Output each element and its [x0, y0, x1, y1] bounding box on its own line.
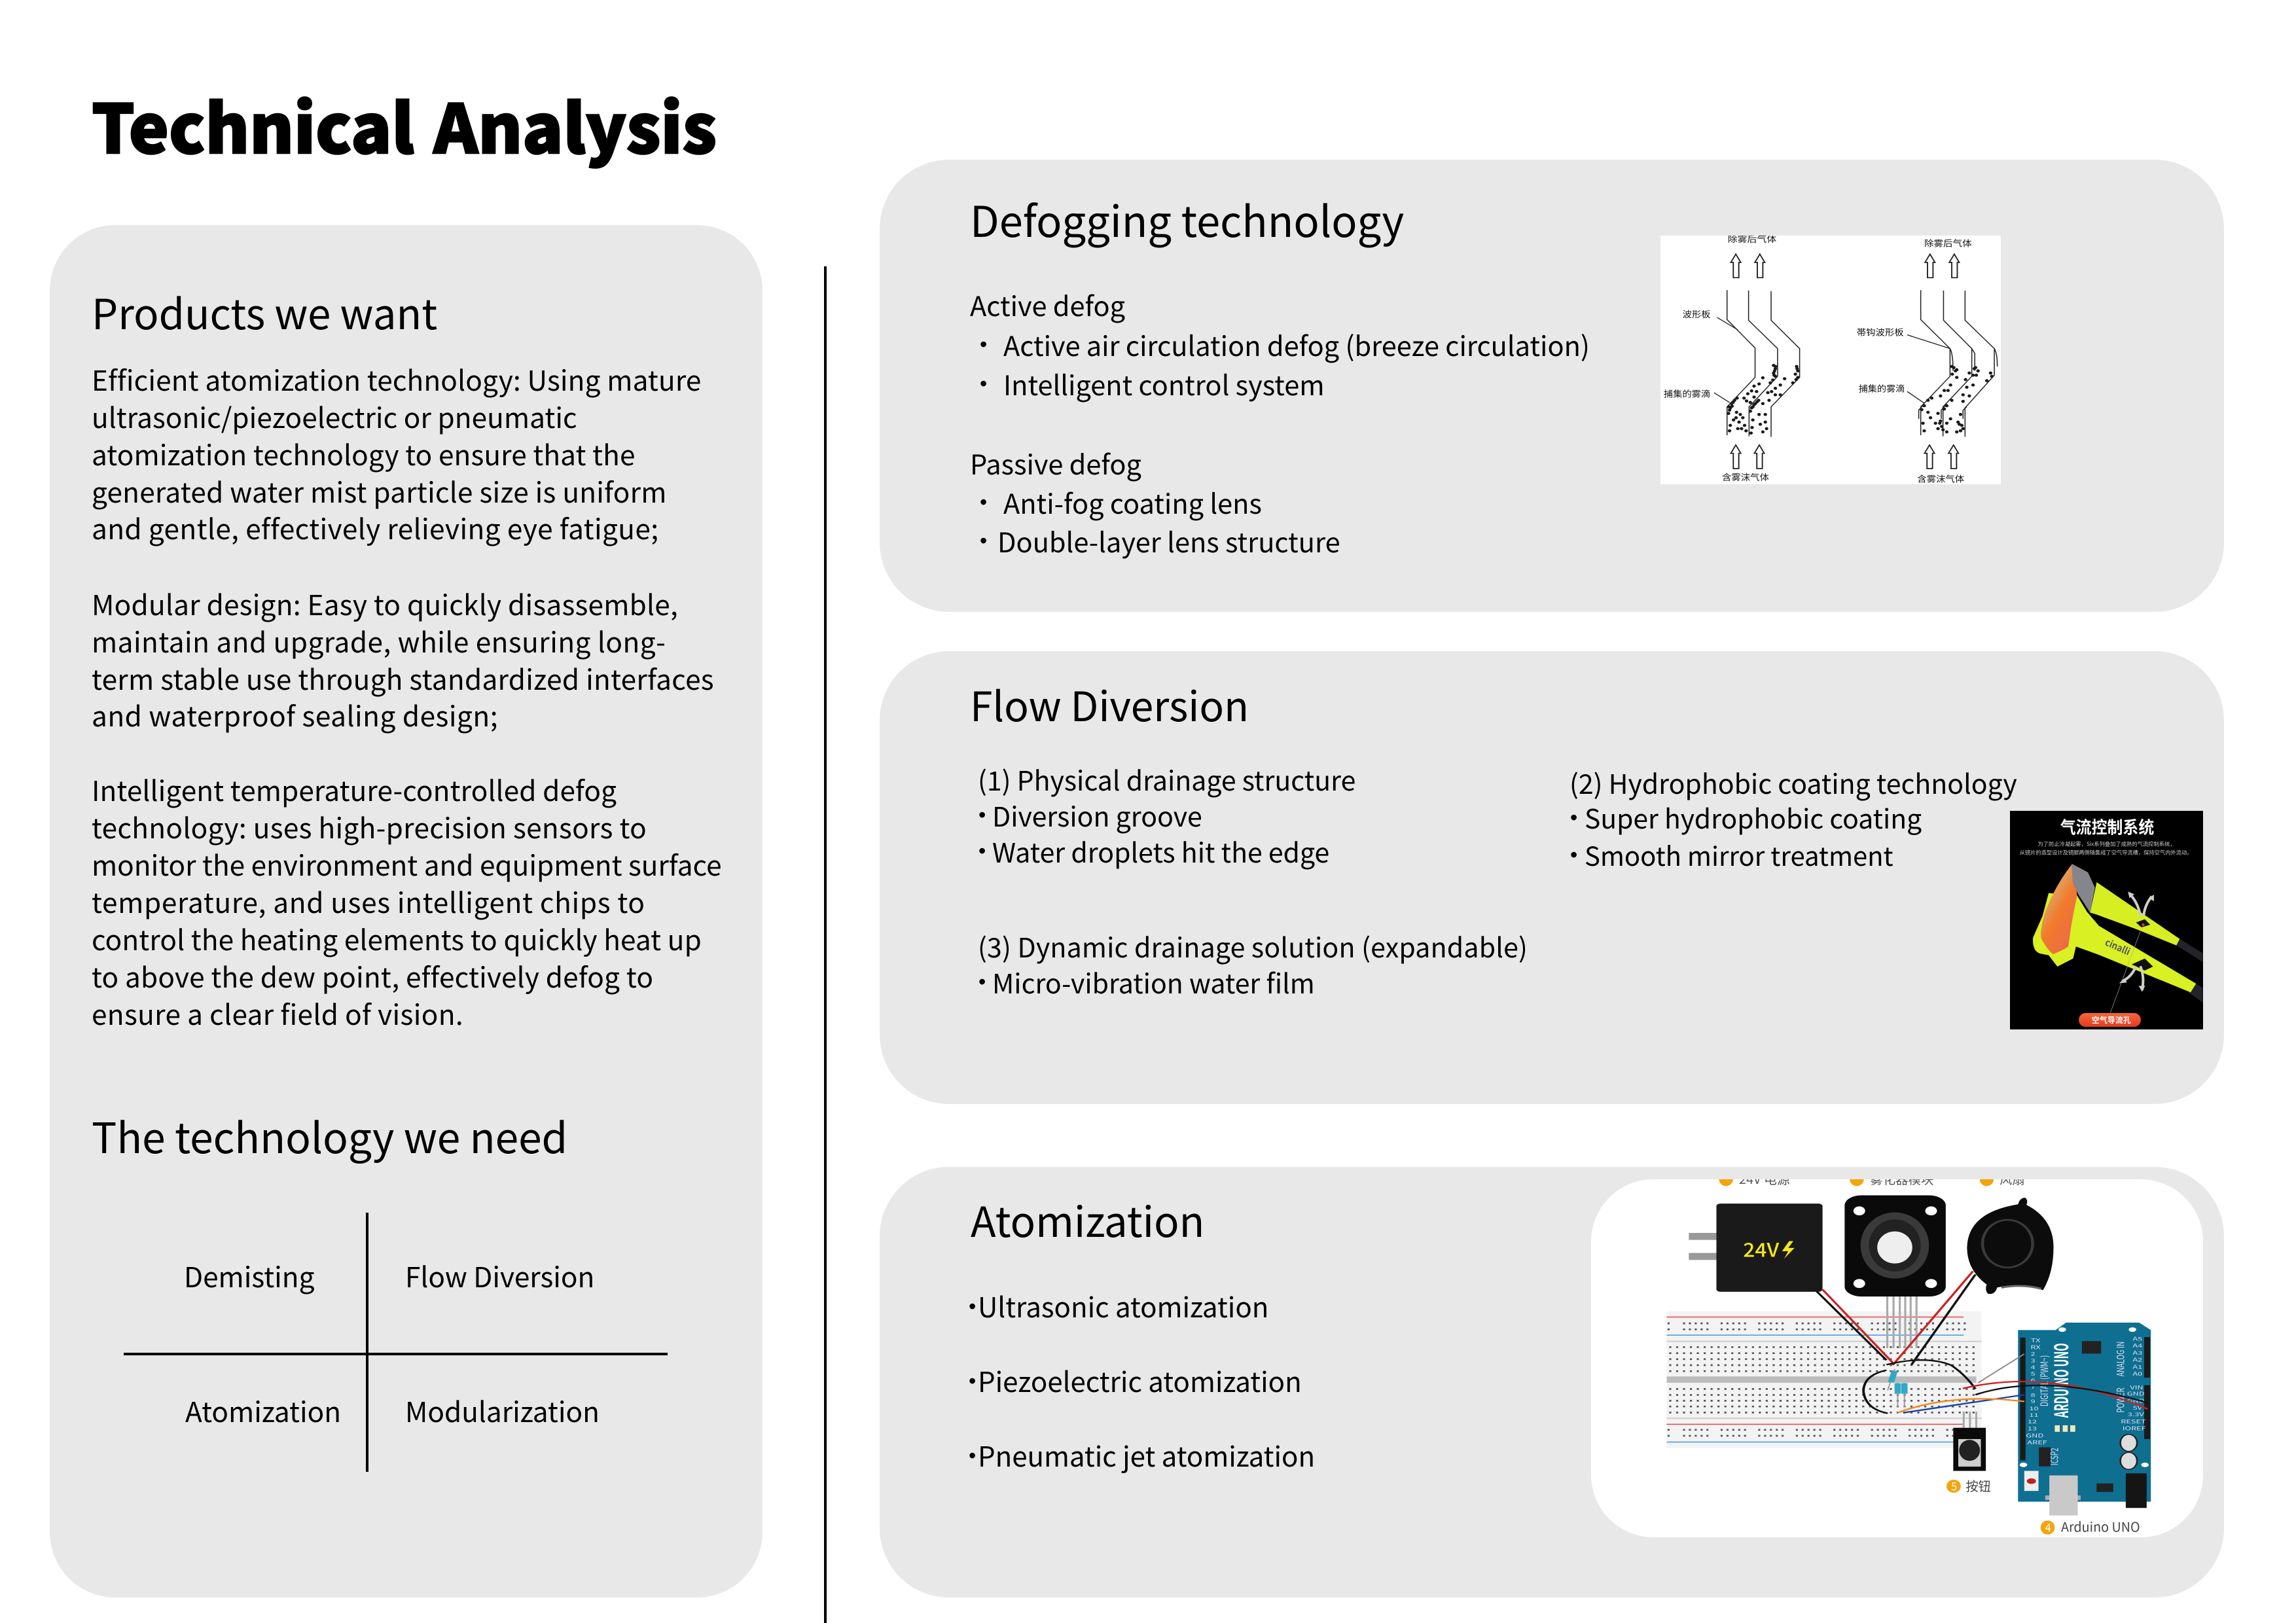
wires and resistors	[1817, 1271, 2147, 1414]
diagram labels: 除雾后气体	[1924, 238, 1972, 249]
diagram labels: 捕集的雾滴	[1859, 382, 1905, 395]
text block: modular design: term stable use through standardized interfaces	[92, 658, 714, 698]
component labels	[1719, 1169, 2024, 1188]
icon: Arduino UNO board	[2018, 1323, 2151, 1516]
label: button: 按钮	[1965, 1476, 1991, 1495]
text block: hydrophobic coating	[1570, 762, 2017, 874]
icon: Arduino UNO board: POWER	[2112, 1387, 2127, 1413]
diagram labels: 捕集的雾滴	[1664, 388, 1710, 400]
panel: atomization: •	[969, 1369, 976, 1393]
text block: active defog	[970, 285, 1590, 403]
text block: efficient atomization: ultrasonic/piezoelectric or pneumatic	[92, 397, 577, 437]
text block: hydrophobic coating: Super hydrophobic coating	[1585, 798, 1922, 836]
text block: atomization methods	[969, 1286, 1315, 1475]
text block: physical drainage structure	[978, 759, 1355, 870]
panel: atomization: •	[969, 1294, 976, 1318]
text block: atomization methods: Piezoelectric atomization	[978, 1361, 1302, 1400]
icon: Arduino UNO board: ANALOG IN	[2112, 1342, 2127, 1376]
cell: modularization: Modularization	[405, 1391, 600, 1431]
pin labels: VIN	[2130, 1384, 2144, 1391]
heading: products we want: Products we want	[92, 281, 437, 342]
pin labels: A3	[2132, 1349, 2142, 1357]
text block: temperature-controlled defog: ensure a clear field of vision.	[92, 993, 463, 1033]
text block: efficient atomization: generated water mist particle size is uniform	[92, 471, 667, 511]
text block: passive defog	[970, 443, 1340, 560]
text block: hydrophobic coating: (2) Hydrophobic coating technology	[1570, 762, 2017, 802]
icon: Arduino UNO board: ICSP2	[2046, 1448, 2061, 1465]
pin labels: A0	[2132, 1370, 2142, 1378]
panel: defogging technology	[880, 160, 2224, 612]
text block: modular design	[92, 584, 714, 735]
pin labels: 4	[2031, 1364, 2036, 1371]
title: Technical Analysis	[92, 75, 717, 173]
diagram labels: 波形板	[1683, 308, 1711, 321]
pin labels: 3.3V	[2128, 1411, 2145, 1418]
text block: active defog: •	[980, 372, 987, 395]
arrows	[1731, 254, 1960, 469]
image: circuit wiring diagram	[1591, 1179, 2203, 1537]
text block: temperature-controlled defog: control the heating elements to quickly heat up	[92, 919, 702, 959]
image: airflow control sunglasses	[2010, 811, 2203, 1029]
badge	[2079, 1013, 2141, 1027]
label: button	[1946, 1476, 1991, 1495]
cell: flow diversion: Flow Diversion	[405, 1256, 594, 1296]
panel: atomization: •	[969, 1444, 976, 1467]
airflow arrows	[2122, 894, 2152, 990]
diagram labels: 帯钩波形板	[1857, 327, 1904, 338]
header text: 气流控制系统	[2060, 815, 2154, 839]
mist droplets	[1729, 365, 1992, 433]
pin labels: A5	[2132, 1336, 2142, 1342]
text block: modular design: Modular design: Easy to quickly disassemble,	[92, 584, 678, 624]
pin labels: 6	[2031, 1377, 2036, 1384]
pin labels: 3	[2031, 1357, 2036, 1364]
text block: temperature-controlled defog: temperature, and uses intelligent chips to	[92, 882, 645, 921]
pin labels: 10	[2029, 1405, 2039, 1412]
text block: efficient atomization: atomization technology to ensure that the	[92, 434, 635, 474]
pin labels	[2026, 1336, 2146, 1446]
text block: hydrophobic coating: •	[1570, 843, 1577, 866]
text block: passive defog: •	[980, 490, 987, 514]
image: airflow control sunglasses: 为了防止冷凝起雾，Six系列叠加了成熟的气流控制系统，	[2037, 841, 2176, 848]
heading: defogging technology: Defogging technology	[970, 188, 1404, 249]
text block: physical drainage structure: •	[978, 839, 986, 863]
pin labels: IOREF	[2123, 1425, 2146, 1432]
pin labels: 2	[2031, 1350, 2036, 1357]
text block: hydrophobic coating: •	[1570, 806, 1577, 829]
text block: passive defog: Double-layer lens structure	[997, 521, 1340, 560]
label: Arduino UNO: Arduino UNO	[2061, 1516, 2140, 1535]
pin labels: 7	[2031, 1383, 2036, 1391]
divider: vertical rule	[824, 266, 827, 1623]
pin labels: 12	[2028, 1418, 2037, 1425]
text block: efficient atomization: Efficient atomization technology: Using mature	[92, 359, 702, 399]
pin labels: TX	[2031, 1337, 2040, 1344]
pin labels: 9	[2031, 1398, 2036, 1405]
pin labels: A2	[2132, 1357, 2142, 1364]
pin labels: RESET	[2121, 1418, 2146, 1425]
label: button: 5	[1951, 1477, 1957, 1494]
cell: atomization: Atomization	[185, 1391, 341, 1431]
text block: active defog: Active air circulation defog (breeze circulation)	[1003, 325, 1590, 364]
vent holes	[2136, 919, 2150, 927]
heading: flow diversion: Flow Diversion	[970, 674, 1249, 733]
text block: efficient atomization	[92, 359, 702, 548]
text block: dynamic drainage: •	[978, 970, 986, 993]
image: airflow control sunglasses: 空气导流孔	[2092, 1014, 2131, 1026]
text block: physical drainage structure: Diversion groove	[992, 795, 1202, 834]
icon: blower fan	[1967, 1198, 2054, 1294]
text block: active defog: Intelligent control system	[1003, 364, 1325, 403]
text block: temperature-controlled defog: Intelligent temperature-controlled defog	[92, 770, 617, 810]
diagram: wave plate demister	[1660, 236, 2001, 484]
icon: Arduino UNO board: DIGITAL (PWM~)	[2036, 1355, 2051, 1406]
text block: dynamic drainage: Micro-vibration water film	[992, 962, 1315, 1001]
text block: temperature-controlled defog: technology: uses high-precision sensors to	[92, 807, 647, 847]
text block: modular design: and waterproof sealing design;	[92, 695, 498, 735]
panel: flow diversion	[880, 651, 2224, 1104]
pin labels: 5	[2031, 1370, 2036, 1378]
pin labels: GND	[2127, 1397, 2145, 1404]
breadboard	[1667, 1311, 1982, 1448]
text block: atomization methods: Ultrasonic atomization	[978, 1286, 1268, 1326]
label: Arduino UNO: 4	[2045, 1518, 2051, 1535]
quadrant table: needed technologies	[124, 1213, 668, 1472]
text block: active defog: Active defog	[970, 285, 1125, 324]
heading: the technology we need: The technology we need	[92, 1105, 567, 1166]
icon: 24V power adapter	[1689, 1204, 1823, 1292]
heading: atomization: Atomization	[971, 1189, 1204, 1249]
pin labels: 13	[2028, 1425, 2037, 1432]
diagram labels	[1664, 233, 1972, 485]
icon: 24V power adapter: 24V	[1743, 1235, 1779, 1262]
panel: products and technology	[50, 225, 762, 1597]
icon: atomizer module	[1844, 1195, 1946, 1348]
text block: physical drainage structure: •	[978, 803, 986, 827]
text block: passive defog: Passive defog	[970, 443, 1141, 482]
text block: temperature-controlled defog: to above the dew point, effectively defog to	[92, 956, 653, 996]
pin labels: 5V	[2133, 1404, 2143, 1412]
icon: push button	[1953, 1412, 1986, 1471]
flow plates	[1714, 290, 1998, 437]
pin labels: AREF	[2027, 1439, 2047, 1446]
text block: physical drainage structure: Water droplets hit the edge	[992, 831, 1329, 870]
text block: passive defog: Anti-fog coating lens	[1003, 482, 1262, 522]
pin labels: 11	[2029, 1412, 2039, 1419]
panel: atomization	[880, 1167, 2224, 1597]
cell: demisting: Demisting	[184, 1256, 314, 1296]
pin labels: A1	[2132, 1363, 2142, 1370]
text block: passive defog: •	[980, 529, 987, 552]
pin labels: RX	[2030, 1344, 2041, 1351]
text block: dynamic drainage: (3) Dynamic drainage solution (expandable)	[978, 926, 1528, 965]
glasses	[2176, 939, 2202, 1002]
image: airflow control sunglasses: cinalli	[2103, 935, 2132, 959]
diagram labels: 含雾沫气体	[1722, 471, 1769, 484]
text block: physical drainage structure: (1) Physical drainage structure	[978, 759, 1355, 798]
text block: hydrophobic coating: Smooth mirror treatment	[1585, 836, 1893, 874]
pin labels: GND	[2026, 1432, 2043, 1439]
label: Arduino UNO	[2041, 1516, 2140, 1535]
pin labels: A4	[2132, 1342, 2142, 1349]
pin labels: 8	[2031, 1391, 2036, 1399]
text block: temperature-controlled defog	[92, 770, 722, 1033]
pin labels: GND	[2127, 1391, 2145, 1398]
text block: modular design: maintain and upgrade, while ensuring long-	[92, 621, 666, 661]
text block: active defog: •	[980, 332, 987, 356]
text block: atomization methods: Pneumatic jet atomization	[978, 1435, 1315, 1475]
text block: dynamic drainage	[978, 926, 1528, 1001]
text block: efficient atomization: and gentle, effectively relieving eye fatigue;	[92, 508, 658, 548]
image: airflow control sunglasses: 从镜片的造型设计及镜腿两侧随集成了空气导流槽，保持空气内外流动。	[2020, 849, 2192, 857]
icon: Arduino UNO board: ARDUINO UNO	[2046, 1343, 2073, 1418]
text block: temperature-controlled defog: monitor the environment and equipment surface	[92, 844, 722, 884]
